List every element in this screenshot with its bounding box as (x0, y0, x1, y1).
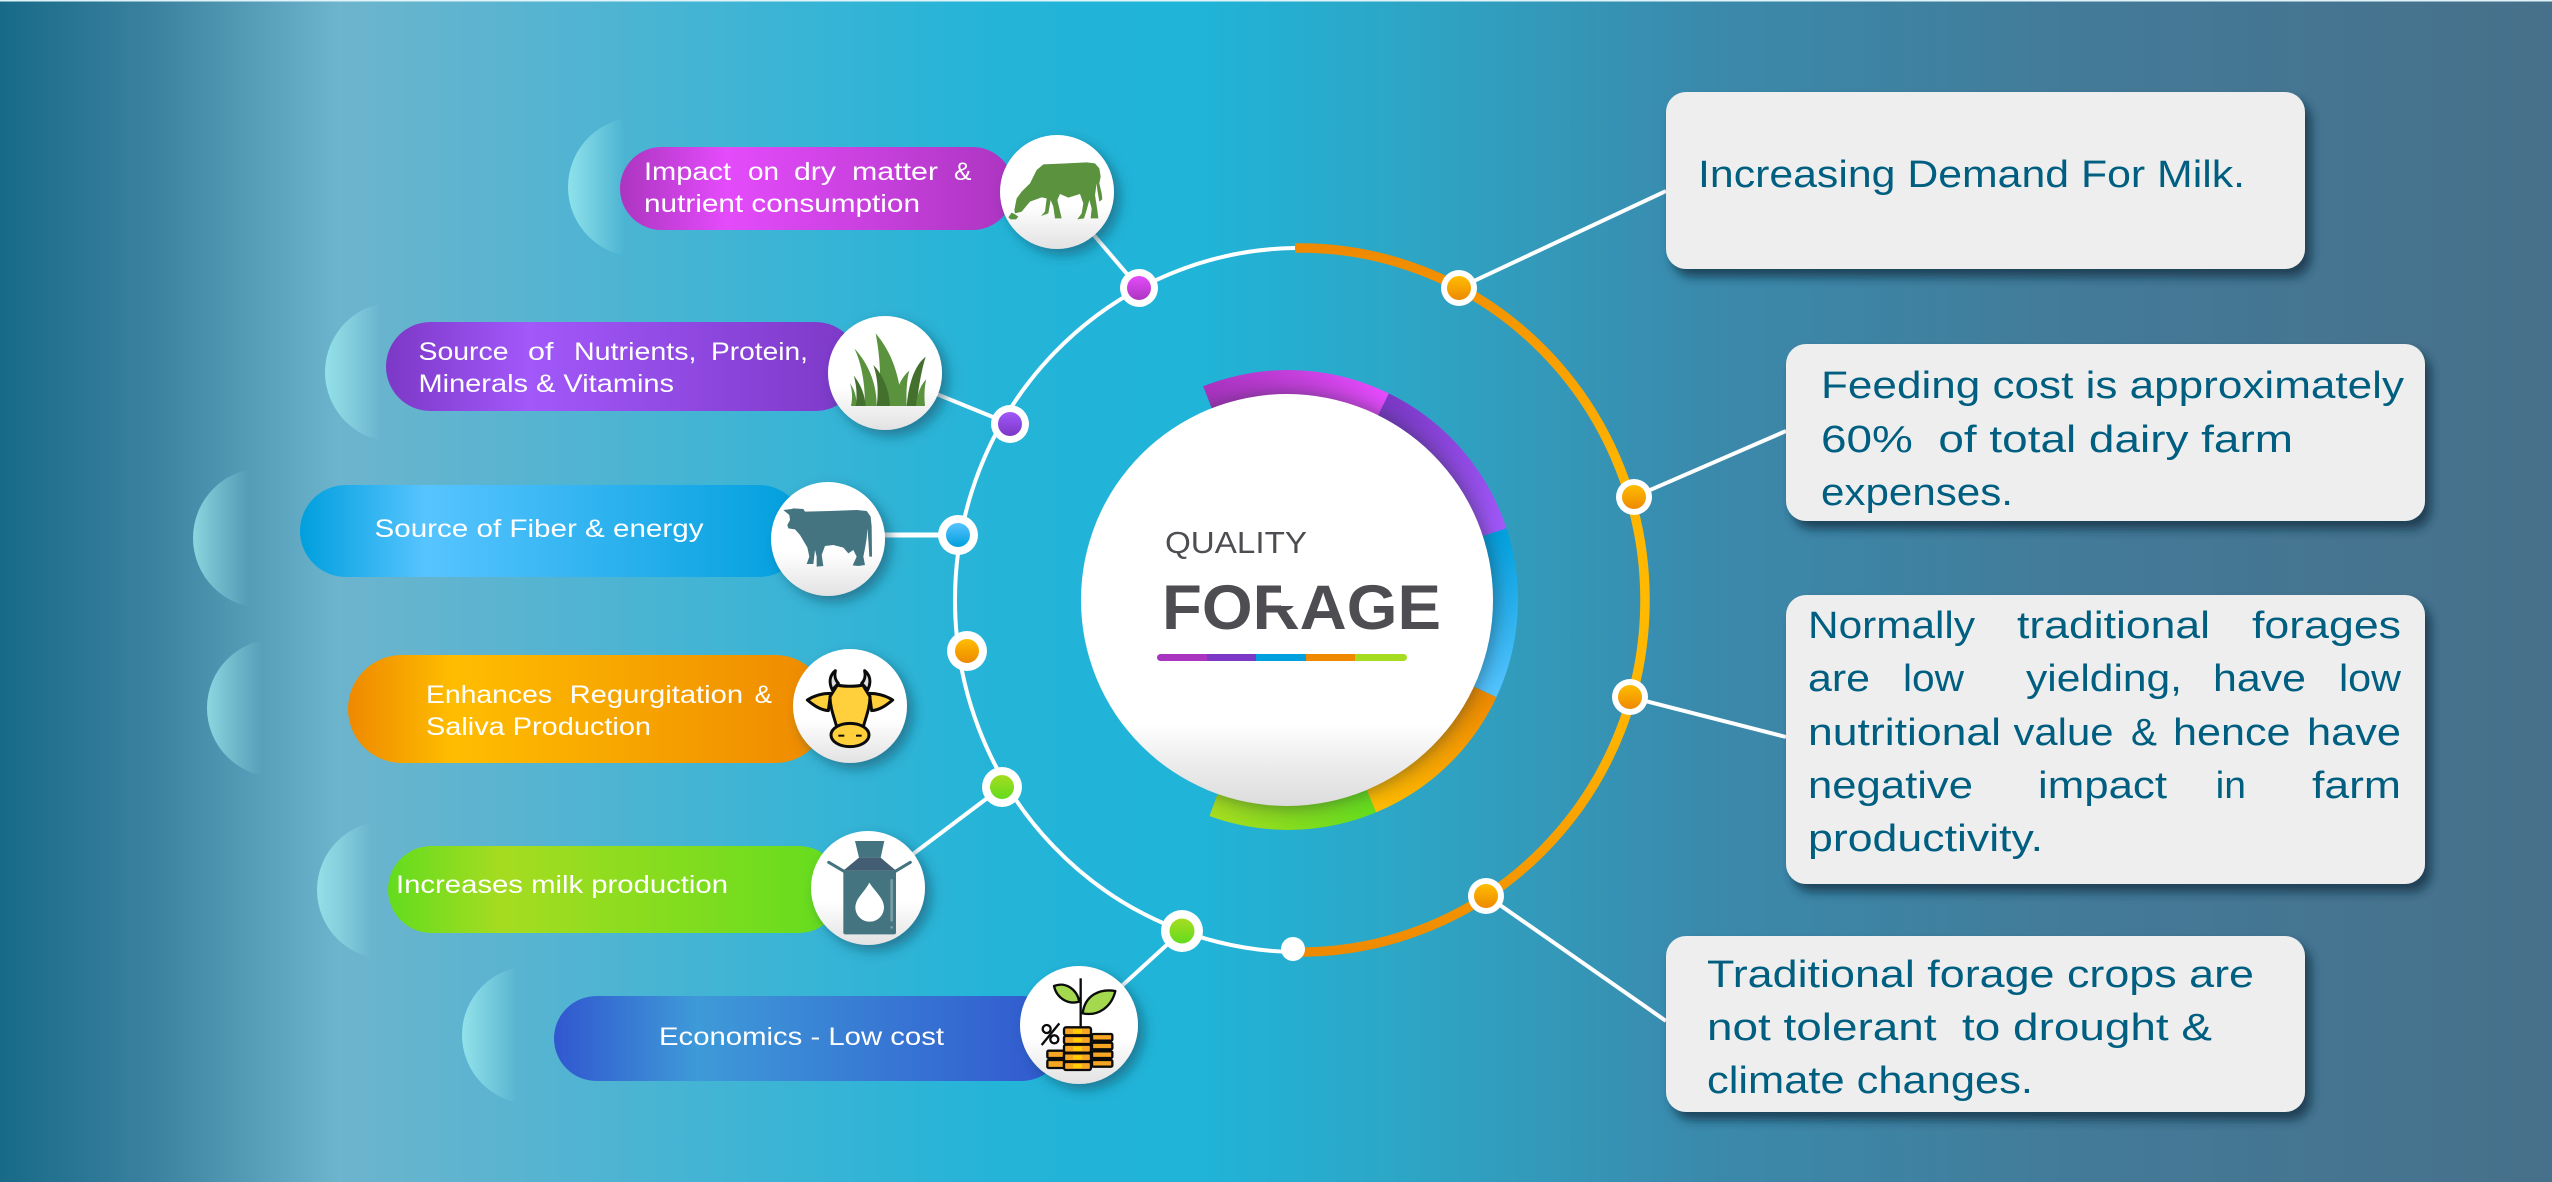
dot: green mid (982, 767, 1022, 807)
icon: cow face (793, 649, 907, 763)
text box 3: farm (2312, 765, 2401, 807)
icon: milk can (811, 831, 925, 945)
icon: grazing cow (1000, 135, 1114, 249)
pill: milk (388, 846, 842, 933)
dot: right 3 (1612, 679, 1648, 715)
faded crescents behind pills (193, 117, 708, 1104)
pill: dry matter: & (954, 158, 972, 186)
pill: fiber: Source of Fiber & energy (374, 515, 704, 543)
icon: plant on coins (1020, 966, 1138, 1084)
dot: white end (1281, 937, 1305, 961)
pill: dry matter: dry (794, 158, 837, 186)
pill: nutrients: Protein, (711, 338, 808, 366)
pill: nutrients: Minerals & Vitamins (418, 370, 674, 398)
text box 3: yielding, (2026, 658, 2182, 700)
text box 2: 60% of total dairy farm (1821, 419, 2293, 461)
outer ring: orange right arc (1293, 248, 1645, 952)
text box 1 (1666, 92, 2305, 269)
pill: regurgitation: Regurgitation (570, 681, 743, 709)
text box 3: forages (2252, 605, 2401, 647)
text box 3: hence (2173, 712, 2290, 754)
text box 3: & (2131, 712, 2157, 754)
pill: dry matter: Impact (644, 158, 731, 186)
pill: regurgitation: Saliva Production (426, 713, 651, 741)
pill: regurgitation (348, 655, 829, 763)
dot: orange left (947, 631, 987, 671)
pill: nutrients (386, 322, 860, 411)
text box 3 (1786, 595, 2425, 884)
dot: right 4 (1468, 878, 1504, 914)
text box 3: nutritional (1808, 712, 2001, 754)
text box 4: not tolerant to drought & (1707, 1007, 2212, 1049)
dot: magenta (1120, 269, 1158, 307)
pill: dry matter (620, 147, 1014, 230)
text box 3: Normally (1808, 605, 1975, 647)
cut in the R and A of the logotype (1281, 578, 1316, 611)
icon: grass (828, 316, 942, 430)
outer ring: white left arc (955, 248, 1295, 952)
pill: nutrients: Nutrients, (574, 338, 696, 366)
text box 3: negative (1808, 765, 1973, 807)
text box 3: low (2339, 658, 2402, 700)
text box 3: are (1808, 658, 1870, 700)
dot: violet (991, 405, 1029, 443)
icon: standing cow (771, 482, 885, 596)
text box 4: Traditional forage crops are (1707, 954, 2254, 996)
node dots (938, 269, 1652, 961)
text box 3: low (1903, 658, 1965, 700)
text box 3: in (2216, 765, 2246, 807)
text box 3: traditional (2017, 605, 2210, 647)
dot: green bottom (1161, 910, 1203, 952)
center colored ring segments (1203, 370, 1518, 830)
pill: economics: Economics - Low cost (659, 1023, 944, 1051)
text box 2 (1786, 344, 2425, 521)
center circle with title (1081, 394, 1493, 806)
dot: right 2 (1616, 479, 1652, 515)
heading: forage: FORAGE (1162, 573, 1441, 643)
pill: dry matter: nutrient consumption (644, 190, 920, 218)
dot: blue (938, 515, 978, 555)
text box 3: have (2307, 712, 2401, 754)
text box 3: impact (2038, 765, 2168, 807)
pill: economics (554, 996, 1064, 1081)
text box 1: Increasing Demand For Milk. (1698, 154, 2245, 196)
pill: dry matter: matter (852, 158, 938, 186)
dot: right 1 (1441, 270, 1477, 306)
pill: milk: Increases milk production (396, 871, 728, 899)
text box 3: value (2014, 712, 2114, 754)
pill: regurgitation: & (755, 681, 772, 709)
pill: nutrients: Source (418, 338, 508, 366)
connector lines (828, 191, 1786, 1025)
text box 4: climate changes. (1707, 1060, 2033, 1102)
multicolor underline (1157, 654, 1407, 661)
text box 3: have (2213, 658, 2306, 700)
text box 3: productivity. (1808, 818, 2043, 860)
text box 2: Feeding cost is approximately (1821, 365, 2404, 407)
text box 4 (1666, 936, 2305, 1112)
heading: quality: QUALITY (1165, 525, 1307, 560)
pill: regurgitation: Enhances (426, 681, 552, 709)
pill: dry matter: on (748, 158, 779, 186)
text box 2: expenses. (1821, 472, 2013, 514)
pill: nutrients: of (528, 338, 554, 366)
pill: fiber (300, 485, 805, 577)
